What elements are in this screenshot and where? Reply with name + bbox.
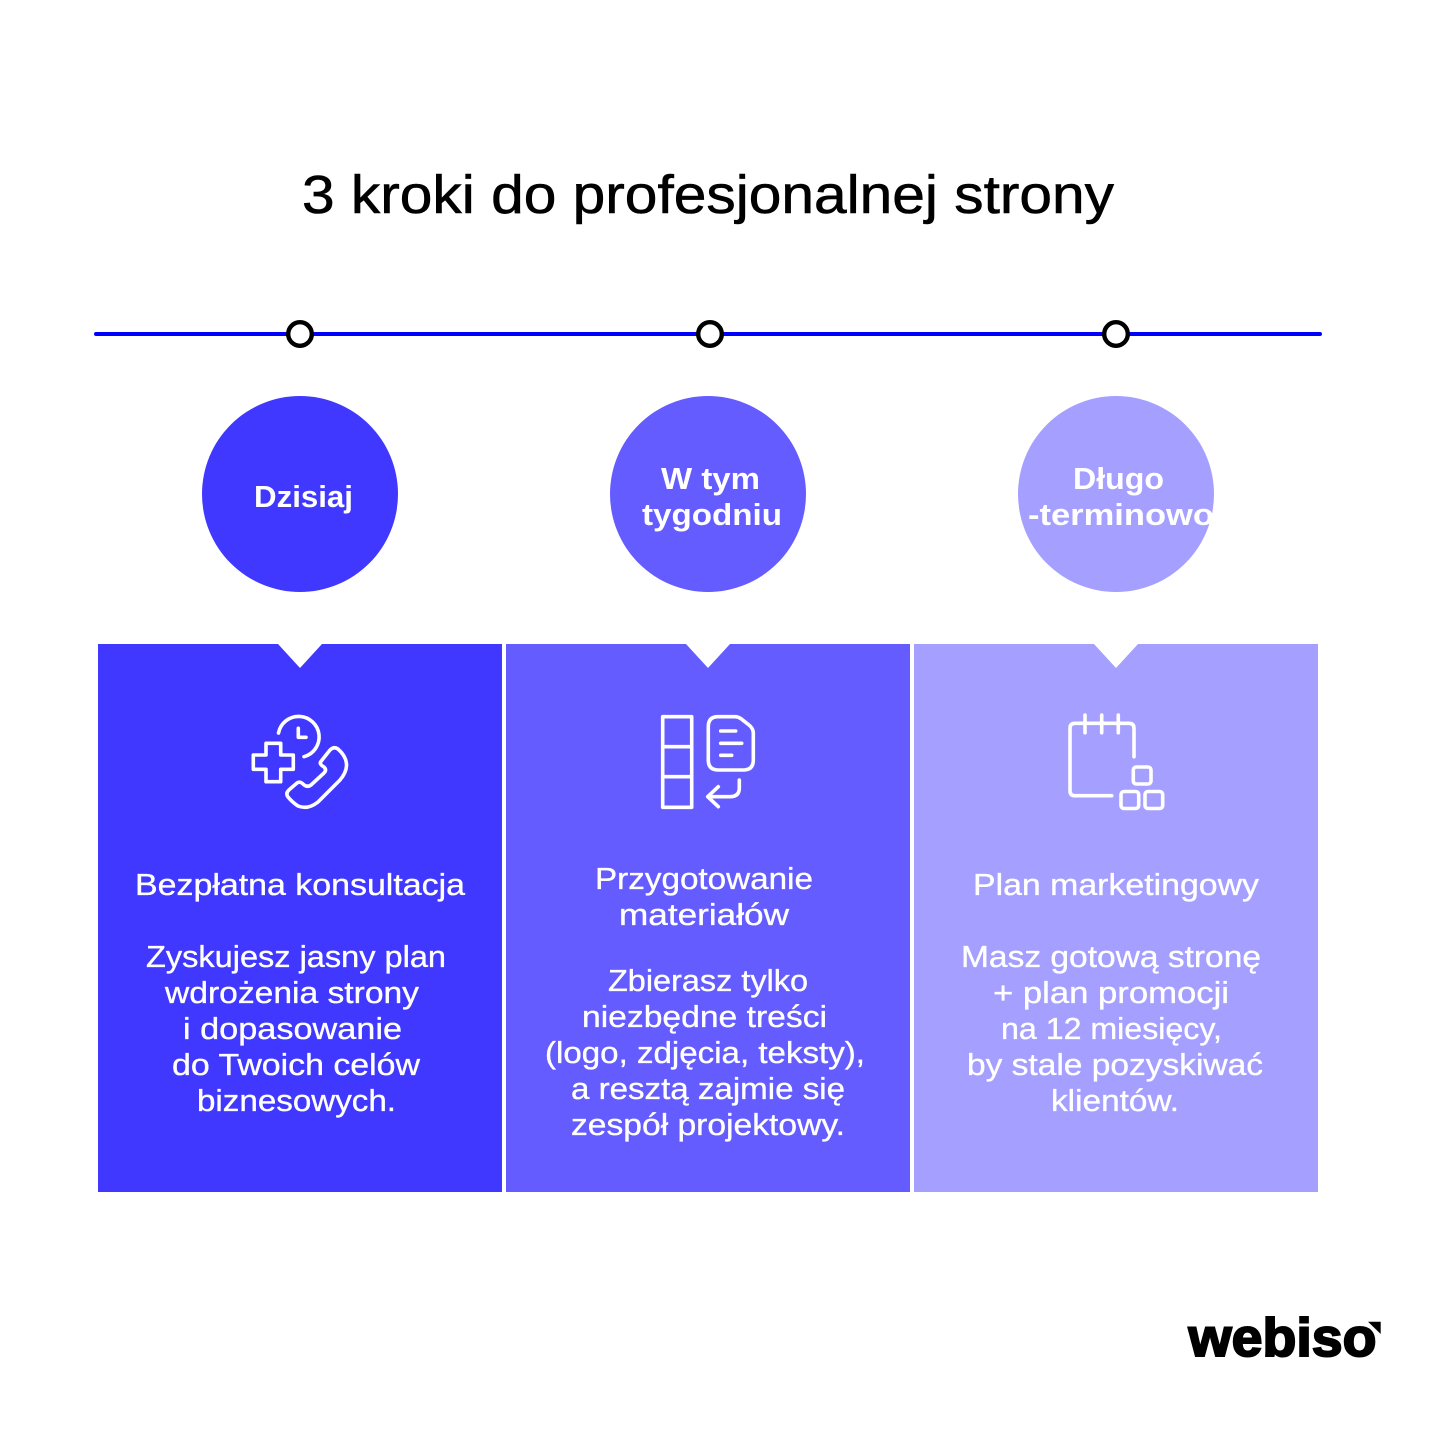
panel body text: niezbędne treści <box>582 999 827 1034</box>
panel body text: zespół projektowy. <box>571 1107 845 1142</box>
badge: W tym tygodniu: W tym <box>661 461 760 496</box>
panel body text <box>961 939 1263 1118</box>
panel body text: Masz gotową stronę <box>961 939 1261 974</box>
badge: Dzisiaj: Dzisiaj <box>254 479 353 514</box>
badge: Długoterminowo: Długo <box>1073 461 1164 496</box>
panel body text: Zbierasz tylko <box>608 963 808 998</box>
panel: Bezpłatna konsultacja <box>98 644 502 1192</box>
icon: table column and document with return arrow <box>663 717 753 807</box>
panel body text: + plan promocji <box>993 975 1229 1010</box>
panel body text: biznesowych. <box>197 1083 396 1118</box>
badge: W tym tygodniu <box>610 396 806 592</box>
panel body text: do Twoich celów <box>172 1047 421 1082</box>
panel body text: (logo, zdjęcia, teksty), <box>545 1035 865 1070</box>
panel: Przygotowanie materiałów <box>506 644 910 1192</box>
panel body text: wdrożenia strony <box>164 975 420 1010</box>
title: 3 kroki do profesjonalnej strony <box>302 165 1114 225</box>
panel: Plan marketingowy <box>914 644 1318 1192</box>
badge: Długoterminowo: -terminowo <box>1028 497 1214 532</box>
panel heading: Plan marketingowy <box>973 867 1260 902</box>
panel body text: a resztą zajmie się <box>571 1071 845 1106</box>
logo: webiso: webiso <box>1187 1308 1376 1368</box>
panel heading: Przygotowanie <box>595 861 813 896</box>
badge: Dzisiaj <box>202 396 398 592</box>
panel body text: Zyskujesz jasny plan <box>146 939 446 974</box>
icon: calendar with blocks <box>1070 715 1163 808</box>
panel body text: i dopasowanie <box>183 1011 402 1046</box>
badge: Długoterminowo <box>1018 396 1214 592</box>
panel body text: na 12 miesięcy, <box>1001 1011 1222 1046</box>
timeline <box>96 322 1320 346</box>
badge: W tym tygodniu: tygodniu <box>642 497 782 532</box>
panel body text: klientów. <box>1051 1083 1179 1118</box>
panel body text <box>545 963 865 1142</box>
panel heading: Bezpłatna konsultacja <box>135 867 466 902</box>
panel body text <box>146 939 446 1118</box>
panel heading: materiałów <box>619 897 790 932</box>
icon: phone, clock and medical cross <box>253 716 347 807</box>
panel body text: by stale pozyskiwać <box>967 1047 1263 1082</box>
panel heading <box>595 861 813 932</box>
